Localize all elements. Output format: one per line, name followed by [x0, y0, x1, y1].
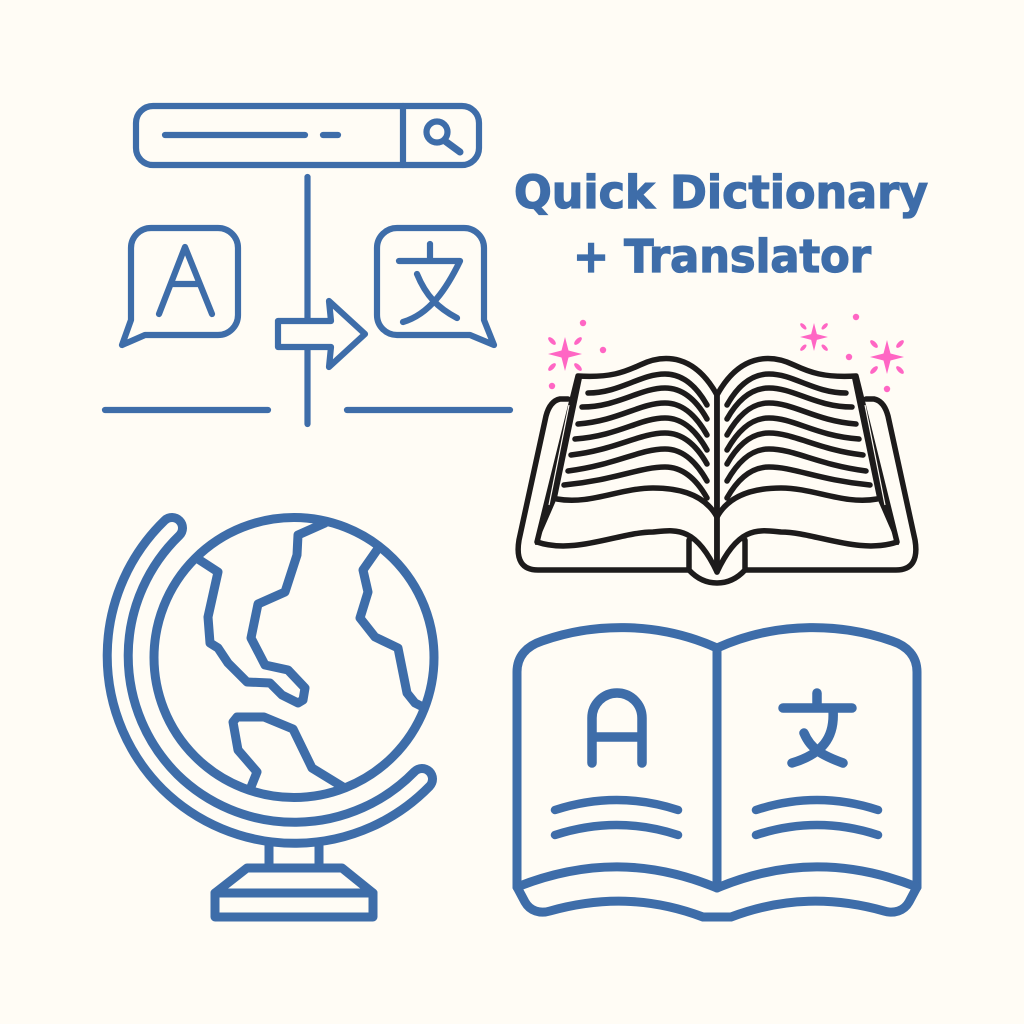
page bottom edge: [517, 867, 917, 888]
sparkle right: [869, 339, 905, 375]
book spine line: [712, 648, 722, 888]
sparkle dots: [549, 314, 890, 392]
icon: globe on stand: [118, 518, 434, 917]
icon: search and translate: [105, 106, 510, 424]
baseline left and right: [105, 407, 510, 413]
cover bottom edge: [517, 887, 917, 917]
arrow: [278, 301, 365, 367]
globe base: [215, 846, 373, 917]
icon: translation book: [517, 628, 917, 917]
search bar: [136, 106, 479, 165]
right page: [717, 359, 898, 572]
text lines left: [555, 800, 678, 835]
character 文: [783, 693, 852, 763]
book center spine line: [714, 395, 720, 570]
book spine: [689, 520, 745, 583]
sparkles: [547, 314, 905, 392]
sparkle top right: [799, 322, 829, 352]
title: [514, 166, 928, 283]
vertical divider line: [304, 177, 311, 424]
icon: open dictionary book with sparkles: [518, 314, 916, 583]
letter A: [592, 693, 642, 763]
book outline: [517, 628, 917, 887]
continent left: [198, 523, 325, 703]
continent bottom: [233, 717, 343, 787]
left page: [536, 359, 717, 572]
continent right: [360, 550, 423, 707]
sparkle left: [547, 336, 583, 372]
speech bubble: letter A: [122, 228, 238, 345]
speech bubble: character 文: [377, 228, 494, 345]
text lines right: [756, 800, 878, 835]
globe stand arc: [118, 528, 422, 833]
title: + Translator: [573, 230, 872, 283]
book cover: [518, 399, 916, 570]
globe sphere: [154, 518, 434, 798]
title: Quick Dictionary: [514, 166, 928, 219]
